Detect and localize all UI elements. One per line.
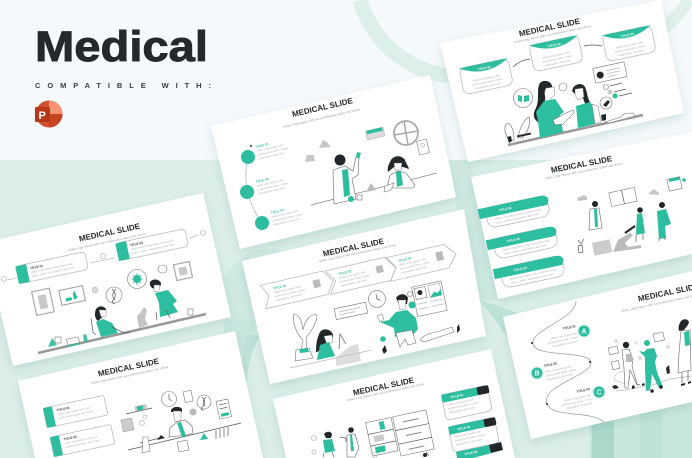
card: title 01: professional slides, charts [448, 400, 479, 411]
text block: title 02 [543, 358, 578, 382]
arrow banner: title 03: infographics and more. [400, 265, 428, 275]
text block: title 03: TITLE 03 [576, 387, 590, 394]
arrow banner: title 02 [325, 255, 399, 294]
heading: MEDICAL SLIDE [78, 222, 141, 243]
tab: title 02: Make a big impact with professional [130, 238, 173, 251]
illustration: pharmacy shelves [312, 410, 434, 458]
card: title 02 [448, 417, 500, 452]
text block: title 02: Make a big impact with [545, 364, 573, 374]
banner: title 01: slides, charts, infographics and more [496, 212, 540, 225]
tab: title 01 [15, 252, 88, 284]
card: title 03 [456, 442, 503, 458]
panel: slide top right [440, 0, 684, 162]
arrow banner: title 01: infographics and more. [276, 292, 303, 302]
arrow banner: title 03: TITLE 03 [398, 256, 412, 263]
illustration: clinic team [577, 177, 686, 256]
banner: title 01: TITLE 01 [498, 206, 512, 212]
text block: title 03: professional slides, charts [561, 397, 593, 407]
tab: title 01: professional slides and charts [58, 409, 94, 420]
card: title 01 [441, 385, 493, 420]
subheading: Make a big impact with our professional slides and charts [347, 382, 425, 402]
callout: title 02: professional slides, charts [542, 54, 573, 64]
banner: title 01: Make a big impact with our professional [495, 207, 542, 221]
card: title 01: TITLE 01 [450, 393, 464, 400]
profile card [593, 62, 627, 83]
text block: title 03: Make a big impact with [564, 393, 592, 403]
subheading: Make a big impact with our professional slides and charts [68, 232, 146, 252]
text block: title 01: Make a big impact with [550, 331, 578, 341]
arrow banner: title 01: TITLE 01 [273, 284, 287, 291]
banner: title 02: TITLE 02 [506, 237, 520, 243]
callout: title 03: Make a big impact with [616, 40, 644, 50]
timeline: Make a big impact with [256, 143, 284, 153]
text block: title 02: infographics and more. [546, 372, 574, 382]
timeline: TITLE 02 [255, 177, 269, 184]
callout: title 02 [529, 35, 583, 72]
subheading: Make a big impact with our professional slides and charts [283, 107, 361, 129]
winding path [533, 301, 604, 422]
timeline: professional slides, charts [257, 146, 289, 157]
timeline: professional slides, charts [257, 181, 289, 192]
marker B: B [534, 370, 540, 378]
timeline: infographics and more. [273, 217, 301, 227]
arrow banner: title 01 [260, 269, 336, 309]
callout: title 03: infographics and more. [617, 48, 645, 58]
banner: title 01 [478, 195, 552, 230]
panel: slide center [242, 209, 486, 384]
tab: title 02: TITLE 02 [63, 435, 77, 441]
callout: title 03 [602, 25, 656, 62]
callout: title 01: TITLE 01 [477, 65, 491, 72]
text block: title 01: professional slides, charts [547, 335, 579, 345]
timeline [240, 138, 305, 230]
panel: slide bottom left [18, 331, 263, 458]
banner: title 03: Make a big impact with our professional [510, 267, 557, 281]
heading: MEDICAL SLIDE [97, 357, 160, 378]
marker A [578, 325, 590, 337]
tab: title 02 [115, 229, 188, 261]
timeline: professional slides, charts [272, 212, 304, 223]
timeline: infographics and more. [258, 151, 286, 161]
text block: title 01: TITLE 01 [562, 324, 576, 331]
tab: title 01: TITLE 01 [56, 406, 70, 412]
tab: title 01: Make a big impact with your [57, 405, 91, 416]
marker C: C [596, 390, 602, 396]
card: title 03: TITLE 03 [464, 450, 478, 456]
callout: title 01: infographics and more. [474, 81, 502, 91]
card: title 02: Make a big impact with [454, 429, 482, 439]
title: Medical [35, 23, 208, 71]
arrow banner: title 02: TITLE 02 [338, 269, 352, 276]
subheading: Make a big impact with our professional slides and charts [514, 24, 592, 44]
banner: title 03 [493, 255, 567, 290]
icon: PowerPoint: P [38, 110, 46, 122]
heading: MEDICAL SLIDE [322, 237, 385, 258]
banner: title 03: slides, charts, infographics and more [511, 272, 555, 285]
heading: MEDICAL SLIDE [291, 96, 354, 119]
tab: title 01 [43, 395, 108, 428]
card: title 02: infographics and more. [455, 437, 483, 447]
text block: title 03 [559, 387, 594, 411]
subheading: Make a big impact with our professional slides and charts [319, 243, 397, 263]
illustration: medical staff [608, 319, 692, 393]
illustration: consultation [290, 281, 460, 368]
icon: PowerPoint [35, 100, 62, 128]
card: title 01: infographics and more. [448, 405, 476, 415]
marker A: A [581, 328, 587, 336]
tab: title 02 [50, 424, 115, 457]
callout: title 03: TITLE 03 [620, 32, 634, 39]
text block: title 02: TITLE 02 [543, 361, 557, 368]
list markers [604, 83, 632, 98]
text block: title 02: professional slides, charts [545, 367, 577, 378]
callout: title 03: professional slides, charts [615, 44, 646, 54]
arrow banner: title 03 [385, 242, 459, 281]
heading: MEDICAL SLIDE [352, 376, 415, 397]
tab: title 02: Make a big impact with your [64, 434, 98, 445]
timeline: infographics and more. [258, 186, 286, 196]
heading: MEDICAL SLIDE [518, 17, 581, 38]
arrow banner: title 02: Make a big impact with [339, 270, 367, 280]
callout: title 02: TITLE 02 [547, 42, 561, 49]
tab: title 01: slides, charts, infographics and more. [31, 265, 76, 278]
panel: slide bottom right [503, 271, 692, 439]
timeline: Make a big impact with [256, 178, 284, 188]
banner: title 03: TITLE 03 [513, 266, 527, 272]
marker C [593, 386, 605, 398]
illustration: researcher [121, 390, 241, 453]
timeline: TITLE 01 [255, 142, 269, 149]
text block: title 01: infographics and more. [552, 339, 580, 348]
arrow banner: title 02: infographics and more. [340, 278, 368, 288]
panel: slide bottom middle [273, 349, 515, 458]
tab: title 02: TITLE 02 [130, 241, 144, 247]
card: title 02: professional slides, charts [455, 432, 486, 443]
panel: slide right middle [471, 132, 692, 299]
text block: title 01 [545, 324, 580, 349]
arrow banner: title 01: professional slides, charts [275, 287, 306, 298]
subheading: Make a big impact with our professional slides and charts [545, 161, 623, 180]
tab: title 01: TITLE 01 [30, 264, 44, 270]
banner: title 02: slides, charts, infographics and more [504, 243, 548, 256]
illustration: laboratory [32, 262, 206, 353]
arrow banner: title 03: Make a big impact with [399, 257, 427, 267]
callout: title 01: Make a big impact with [473, 73, 501, 83]
tab: title 02: professional slides and charts [65, 438, 101, 449]
callout: title 01: professional slides, charts [472, 77, 503, 87]
banner: title 02 [486, 226, 560, 261]
callout: title 01 [459, 58, 513, 95]
illustration: two women [505, 81, 643, 145]
tab: title 01: Make a big impact with professional [30, 261, 73, 274]
callout: title 02: infographics and more. [544, 58, 572, 68]
illustration: lab scene [305, 121, 437, 205]
banner: title 02: Make a big impact with our professional [503, 238, 550, 252]
timeline: Make a big impact with [271, 209, 299, 219]
card: title 02: TITLE 02 [457, 425, 471, 432]
callout: title 02: Make a big impact with [543, 50, 571, 60]
heading: MEDICAL SLIDE [550, 154, 614, 175]
subheading: Make a big impact with our professional slides and charts [91, 365, 169, 385]
panel: slide top middle [211, 75, 456, 249]
arrow banner: title 01: Make a big impact with [274, 284, 302, 294]
card: title 01: Make a big impact with [447, 397, 475, 407]
text block: title 03: infographics and more. [566, 401, 593, 410]
arrow banner: title 02: professional slides, charts [340, 273, 371, 284]
arrow banner: title 03: professional slides, charts [400, 260, 431, 271]
tab: title 02: slides, charts, infographics and more. [131, 242, 176, 255]
panel: slide left [0, 193, 231, 366]
subtitle: compatible with: COMPATIBLE WITH: [35, 81, 211, 90]
timeline: TITLE 03 [270, 208, 284, 215]
marker B [531, 367, 543, 379]
